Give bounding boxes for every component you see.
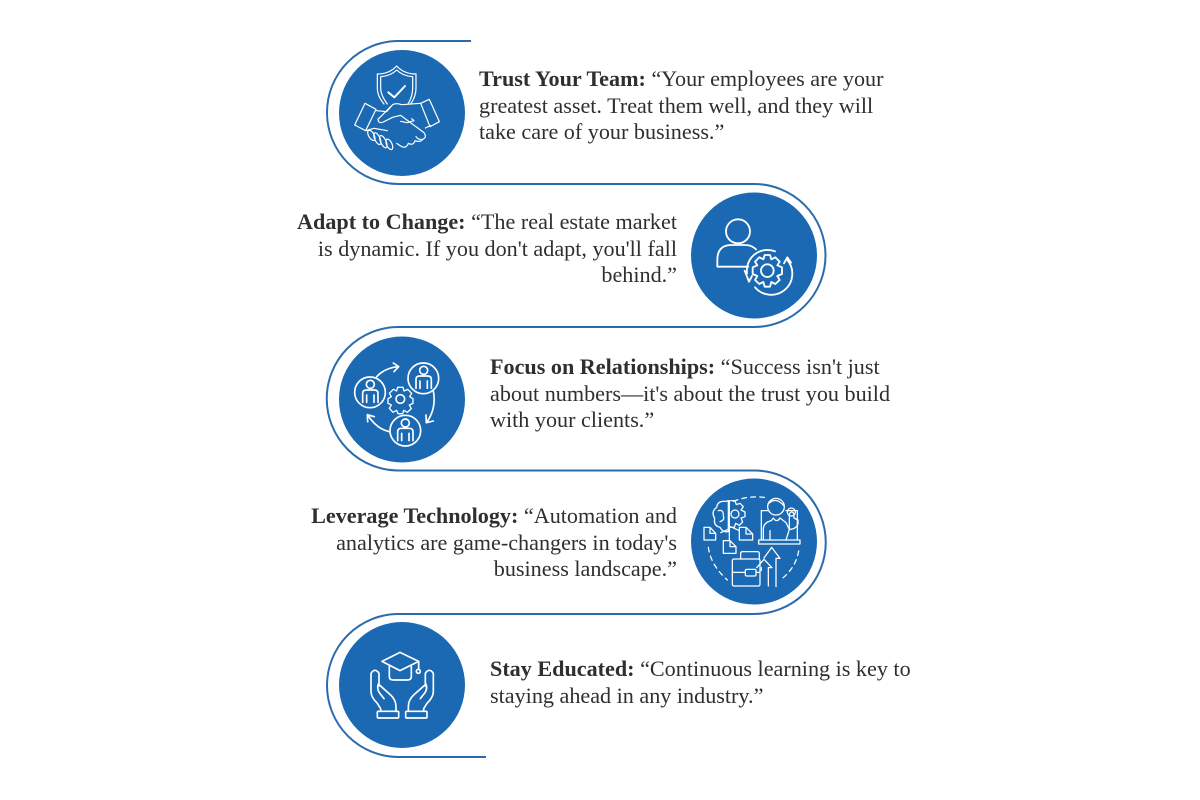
text: adapt to change: behind.” [601, 262, 677, 287]
text: trust your team [479, 66, 884, 144]
text: adapt to change: is dynamic. If you don't adapt, you'll fall [318, 236, 677, 260]
text: leverage technology: business landscape.” [494, 556, 677, 581]
text: focus on relationships: about numbers—it's about the trust you build [490, 380, 890, 406]
text: stay educated: Stay Educated: “Continuous learning is key to [490, 656, 911, 681]
icon: people cycle with gear [339, 336, 465, 462]
text: leverage technology: Leverage Technology: “Automation and [311, 503, 677, 528]
serpentine connector line [327, 41, 826, 757]
icon: technology brain, presenter and briefcase [691, 478, 817, 604]
icon: person with rotating gear [691, 192, 817, 318]
text: trust your team: Trust Your Team: “Your employees are your [479, 66, 883, 91]
text: leverage technology [311, 503, 677, 581]
text: stay educated [490, 656, 911, 708]
text: leverage technology: analytics are game-changers in today's [336, 530, 677, 554]
text: focus on relationships: with your clients.” [490, 407, 654, 432]
text: adapt to change [297, 209, 677, 287]
text: trust your team: take care of your business.” [479, 119, 724, 144]
icon: graduation cap in open hands [339, 622, 465, 748]
icon: trust handshake and shield [339, 50, 465, 176]
text: trust your team: greatest asset. Treat them well, and they will [479, 92, 873, 118]
text: focus on relationships [490, 354, 890, 432]
text: focus on relationships: Focus on Relationships: “Success isn't just [490, 354, 880, 379]
text: adapt to change: Adapt to Change: “The real estate market [297, 209, 677, 234]
text: stay educated: staying ahead in any industry.” [490, 682, 763, 708]
